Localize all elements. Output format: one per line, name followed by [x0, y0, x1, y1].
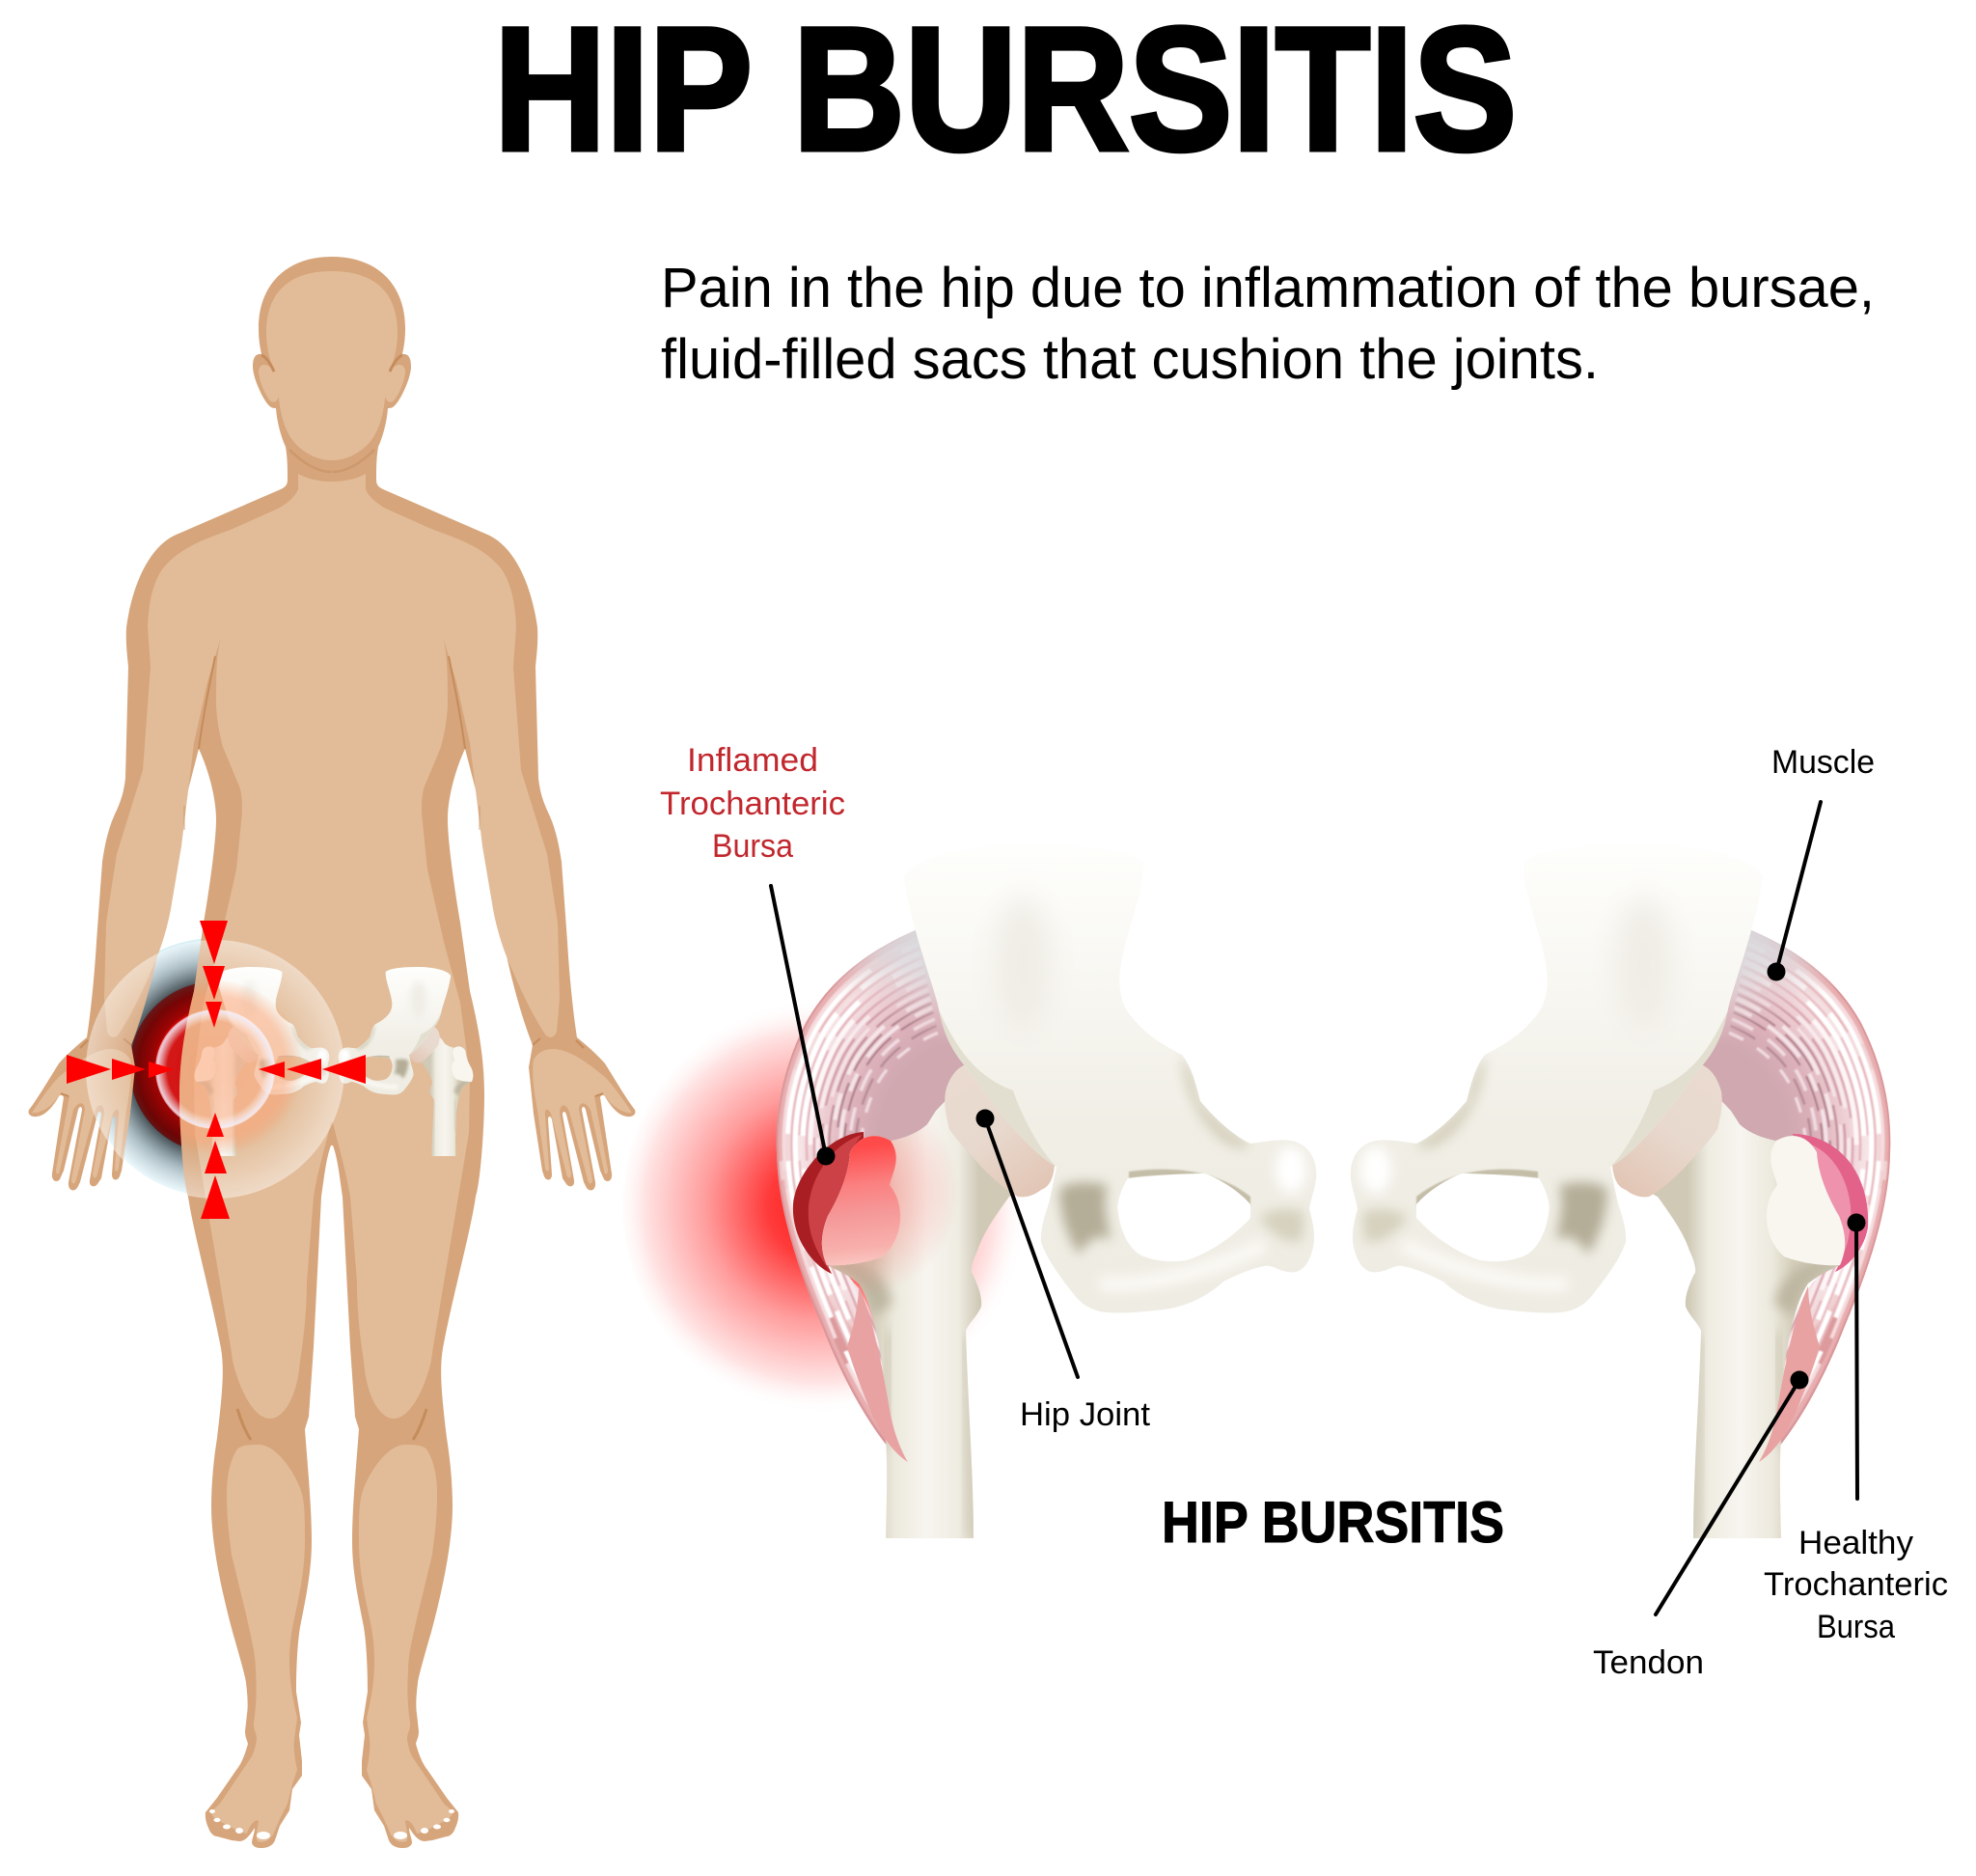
subheading: HIP BURSITIS	[1162, 1490, 1504, 1555]
label: inflamed trochanteric bursa: Trochanteric	[660, 786, 845, 822]
pain highlight rings	[86, 940, 344, 1199]
left pelvis and femur	[822, 844, 1316, 1538]
right pelvis and femur	[1351, 844, 1845, 1538]
red pain arrows	[67, 921, 366, 1219]
human body figure	[29, 257, 635, 1848]
label: inflamed trochanteric bursa	[660, 742, 845, 865]
description text: fluid-filled sacs that cushion the joints.	[661, 328, 1599, 391]
pointer: healthy bursa	[1847, 1214, 1866, 1499]
label: muscle: Muscle	[1771, 744, 1875, 781]
left tendon	[847, 1286, 908, 1462]
small pelvis and femur bones on the figure	[195, 967, 473, 1156]
description text	[661, 257, 1875, 391]
muscle on the healthy side	[1702, 930, 1890, 1461]
pointer: inflamed bursa	[771, 886, 836, 1166]
gluteal muscle	[777, 930, 965, 1461]
pointer: hip joint	[976, 1110, 1078, 1377]
label: inflamed trochanteric bursa: Bursa	[712, 828, 793, 865]
red overlay on the trochanter	[822, 1127, 949, 1282]
healthy bursa	[1792, 1134, 1868, 1272]
right tendon	[1759, 1286, 1820, 1462]
pointer: tendon	[1656, 1370, 1808, 1614]
pain glow behind the body	[86, 938, 344, 1197]
label: healthy trochanteric bursa: Healthy	[1798, 1525, 1913, 1561]
label: healthy trochanteric bursa	[1764, 1525, 1948, 1645]
label: healthy trochanteric bursa: Bursa	[1817, 1609, 1895, 1645]
label: healthy trochanteric bursa: Trochanteric	[1764, 1566, 1948, 1603]
red inflammation glow	[622, 999, 1037, 1414]
pointer: muscle	[1768, 802, 1821, 980]
label: inflamed trochanteric bursa: Inflamed	[687, 742, 818, 779]
inflamed bursa	[793, 1132, 864, 1274]
label: hip joint: Hip Joint	[1020, 1396, 1151, 1433]
inflamed hip illustration	[622, 844, 1316, 1538]
description text: Pain in the hip due to inflammation of the bursae,	[661, 257, 1875, 319]
healthy hip illustration	[1351, 844, 1890, 1538]
label: tendon: Tendon	[1593, 1644, 1704, 1681]
